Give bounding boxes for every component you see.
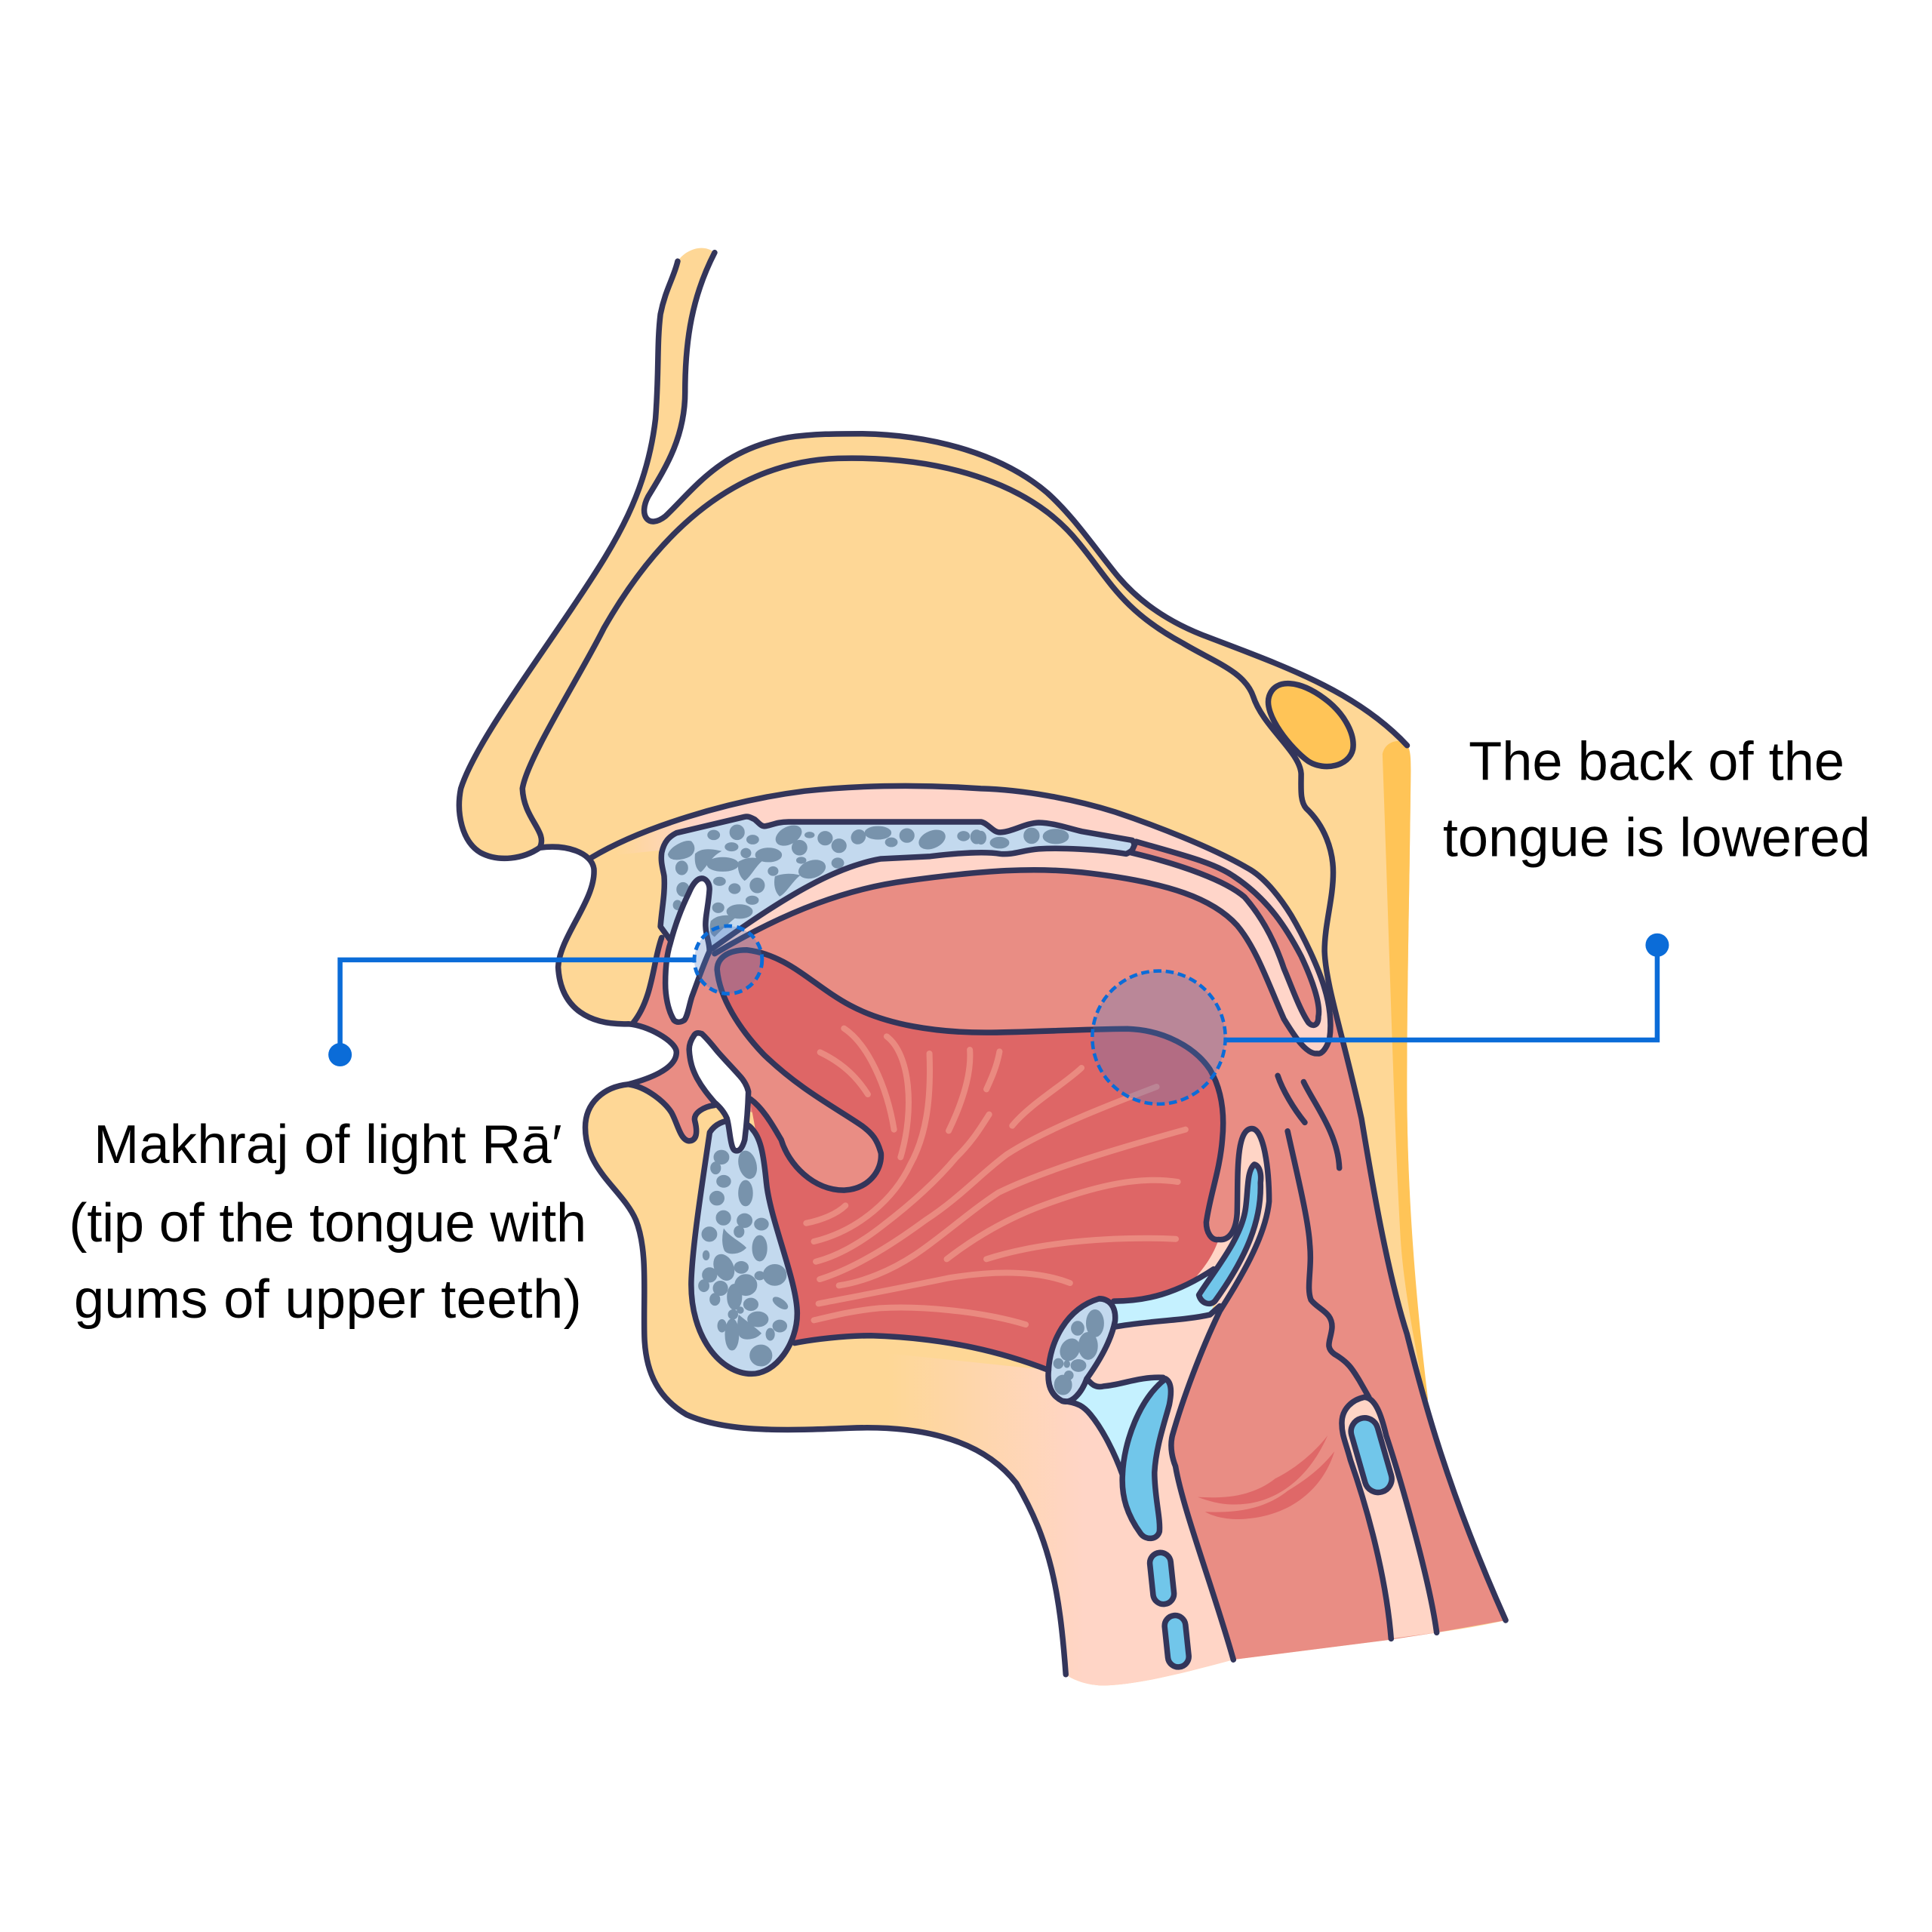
soft palate strip (1131, 841, 1318, 1025)
label: makhraj of light Ra: Makhraj of light Rā′ (94, 1115, 561, 1175)
lower front tooth (689, 1033, 749, 1151)
label: back of the tongue (1443, 731, 1870, 869)
gums and sublingual pocket (629, 937, 881, 1190)
larynx cartilage fan (1062, 1377, 1161, 1475)
dashed marker: back of tongue (1092, 971, 1226, 1104)
label: makhraj of light Ra: gums of upper teeth) (74, 1269, 582, 1330)
hyoid bone (1048, 1299, 1115, 1401)
nasal sinus (1268, 684, 1353, 767)
leader line: tongue tip (328, 960, 694, 1066)
label: makhraj of light Ra (69, 1115, 586, 1330)
oral cavity and pharynx (712, 863, 1506, 1660)
dashed marker: tongue tip (694, 926, 762, 994)
label: back of the tongue: tongue is lowered (1443, 808, 1870, 869)
palate soft tissue band (592, 786, 1331, 1054)
upper front tooth (666, 878, 709, 1022)
tongue (717, 950, 1223, 1371)
tongue muscle fibres (806, 1029, 1186, 1324)
epiglottis (1196, 1129, 1269, 1311)
lower jaw bone (691, 1121, 797, 1374)
head skin silhouette (459, 248, 1506, 1685)
tracheal cartilage ring 1 (1149, 1552, 1175, 1605)
esophagus tube (1342, 1397, 1437, 1638)
hyoid bone spots (1054, 1311, 1103, 1394)
thyroid cartilage (1122, 1379, 1171, 1538)
hard palate bone spots, rear (977, 829, 1068, 848)
spine band (1383, 741, 1428, 1400)
chin and neck skin (789, 1306, 1233, 1685)
neck muscle creases (1198, 1435, 1334, 1519)
hyoid ligament (1114, 1266, 1217, 1327)
hard palate bone (660, 817, 1134, 949)
label: back of the tongue: The back of the (1469, 731, 1844, 792)
tracheal cartilage ring 2 (1164, 1614, 1190, 1668)
anatomy outlines (459, 253, 1506, 1675)
leader line: back of tongue (1225, 934, 1669, 1040)
lower jaw bone spots (700, 1150, 788, 1365)
label: makhraj of light Ra: (tip of the tongue with (69, 1193, 586, 1254)
esophagus cartilage (1348, 1415, 1395, 1496)
epiglottis cartilage (1199, 1164, 1261, 1303)
hard palate bone spots (669, 823, 982, 935)
